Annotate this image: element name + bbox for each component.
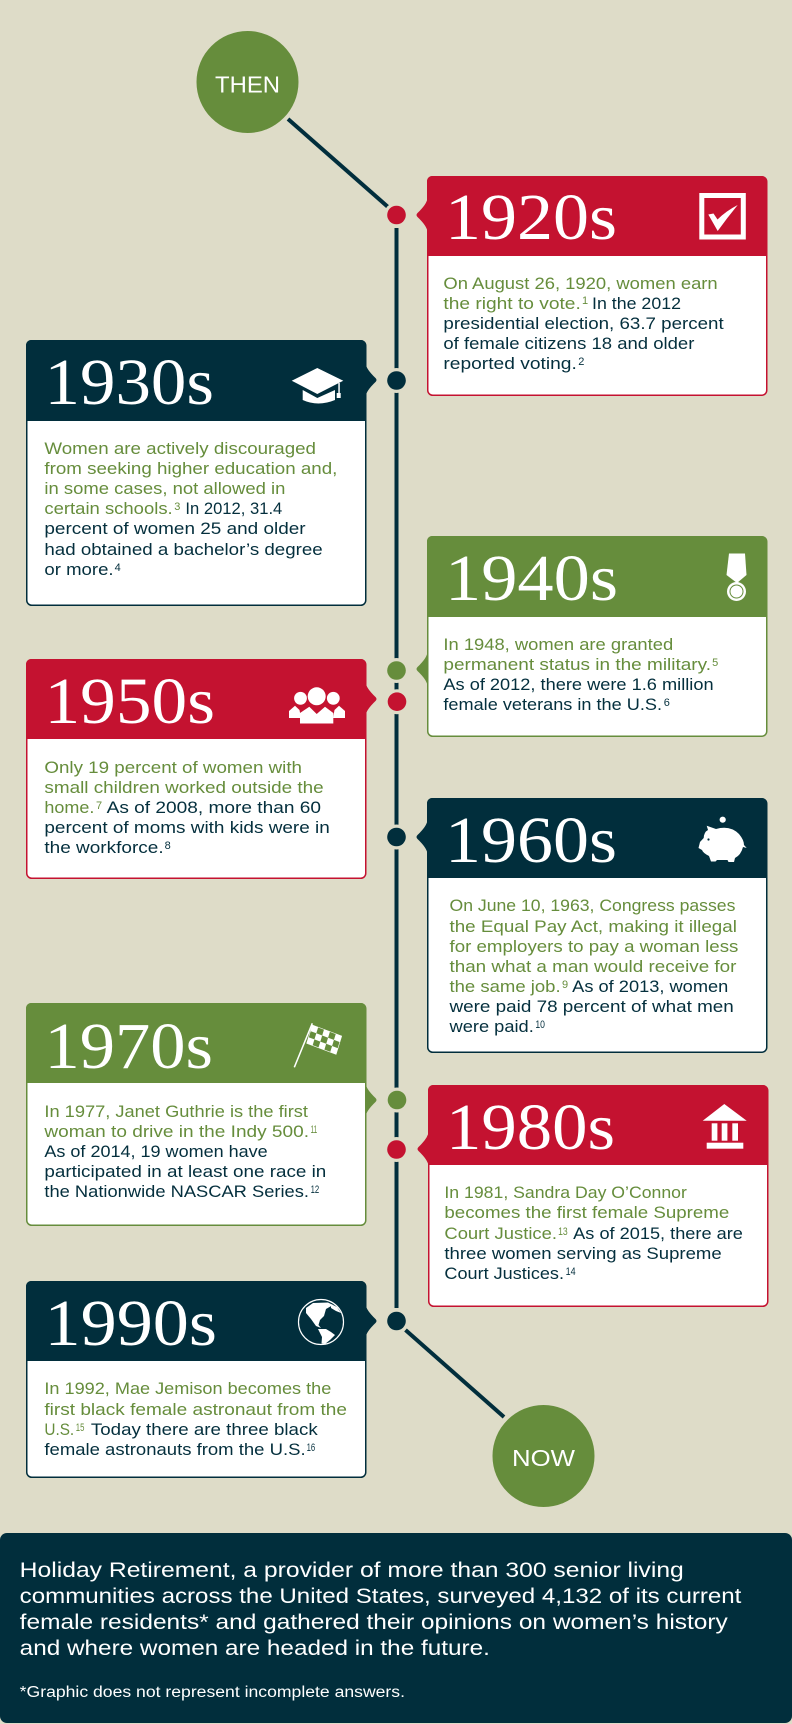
panel: 1930s <box>26 340 376 605</box>
text: 1950s body: 7 <box>96 800 102 812</box>
text: 1920s body: In the 2012 <box>592 294 681 313</box>
then badge: THEN <box>215 72 280 98</box>
text: 1980s body: Court Justices. <box>444 1264 564 1283</box>
text: 1960s body: than what a man would receive for <box>450 957 737 976</box>
icon: graduation cap <box>292 368 343 404</box>
text: 1920s body: On August 26, 1920, women earn <box>443 274 718 293</box>
text: 1960s body: the Equal Pay Act, making it illegal <box>450 917 737 936</box>
text: 1950s body: the workforce. <box>44 838 164 857</box>
text: 1960s body: the same job. <box>450 977 561 996</box>
text: 1980s body: becomes the first female Supreme <box>444 1203 729 1222</box>
text: 1990s body: 16 <box>307 1442 315 1454</box>
text: 1970s body: the Nationwide NASCAR Series. <box>44 1182 309 1201</box>
text: 1980s body: Court Justice. <box>444 1224 557 1243</box>
text: 1970s body <box>43 1102 326 1201</box>
timeline line <box>288 119 504 1417</box>
text: 1930s body <box>44 439 337 579</box>
text: 1950s body: small children worked outside the <box>44 778 324 797</box>
text: 1950s body: As of 2008, more than 60 <box>107 798 321 817</box>
text: 1930s body: from seeking higher education and, <box>44 459 337 478</box>
heading: 1970s: 1970s <box>44 1010 213 1083</box>
icon: globe <box>298 1300 344 1344</box>
text: survey description: Holiday Retirement, a provider of more than 300 senior living <box>20 1559 684 1582</box>
text: 1960s body: were paid 78 percent of what men <box>448 997 734 1016</box>
text: 1990s body <box>44 1379 347 1459</box>
text: 1940s body: female veterans in the U.S. <box>443 695 662 714</box>
text: 1930s body: or more. <box>44 560 114 579</box>
text: 1920s body <box>443 274 724 373</box>
text: 1930s body: 4 <box>115 562 121 574</box>
text: 1970s body: 12 <box>311 1184 319 1196</box>
text: 1980s body <box>444 1183 743 1283</box>
text: 1960s body: 10 <box>535 1019 545 1031</box>
text: 1930s body: In 2012, 31.4 <box>185 499 282 518</box>
text: 1930s body: had obtained a bachelor’s degree <box>44 540 323 559</box>
now badge: NOW <box>512 1445 575 1471</box>
panel: 1970s <box>26 1003 376 1225</box>
text: 1960s body <box>448 896 738 1036</box>
text: 1950s body <box>44 758 330 857</box>
text: survey description: communities across the United States, surveyed 4,132 of its current <box>20 1585 742 1608</box>
text: survey description <box>20 1559 742 1660</box>
text: 1940s body: In 1948, women are granted <box>443 635 673 654</box>
icon: piggy bank <box>698 817 747 862</box>
heading: 1920s: 1920s <box>445 181 617 254</box>
heading: 1950s: 1950s <box>44 665 215 738</box>
text: 1970s body: As of 2014, 19 women have <box>44 1142 268 1161</box>
icon: medal <box>726 554 746 601</box>
text: 1970s body: In 1977, Janet Guthrie is the first <box>44 1102 308 1121</box>
text: 1920s body: presidential election, 63.7 percent <box>443 314 724 333</box>
timeline dots <box>384 202 410 1334</box>
text: 1920s body: reported voting. <box>443 354 577 373</box>
text: 1940s body: 5 <box>712 657 718 669</box>
text: 1960s body: for employers to pay a woman less <box>450 937 738 956</box>
text: 1990s body: Today there are three black <box>91 1420 318 1439</box>
heading: 1960s: 1960s <box>445 804 617 877</box>
icon: checkbox <box>702 196 743 237</box>
heading: 1990s: 1990s <box>44 1287 217 1360</box>
text: 1980s body: three women serving as Supreme <box>444 1244 722 1263</box>
text: 1930s body: in some cases, not allowed in <box>44 479 285 498</box>
text: 1920s body: 1 <box>582 295 588 307</box>
text: 1990s body: 15 <box>76 1422 84 1434</box>
text: 1950s body: 8 <box>165 840 171 852</box>
icon: group of people <box>289 687 345 724</box>
text: 1980s body: As of 2015, there are <box>573 1224 743 1243</box>
text: footnote: *Graphic does not represent incomplete answers. <box>20 1684 405 1701</box>
text: 1940s body <box>443 635 718 714</box>
text: 1940s body: As of 2012, there were 1.6 million <box>443 675 714 694</box>
text: 1970s body: 11 <box>311 1124 317 1136</box>
text: survey description: and where women are headed in the future. <box>20 1637 490 1660</box>
panel: 1990s <box>26 1281 376 1477</box>
heading: 1940s: 1940s <box>445 542 618 615</box>
panel: 1980s <box>418 1085 768 1306</box>
text: 1940s body: 6 <box>664 697 670 709</box>
text: 1930s body: percent of women 25 and older <box>44 519 306 538</box>
text: 1950s body: Only 19 percent of women with <box>44 758 302 777</box>
panel: survey note <box>0 1533 792 1723</box>
text: 1970s body: woman to drive in the Indy 500. <box>43 1122 309 1141</box>
text: survey description: female residents* and gathered their opinions on women’s history <box>20 1611 728 1634</box>
text: 1990s body: In 1992, Mae Jemison becomes the <box>44 1379 331 1398</box>
text: 1990s body: U.S. <box>44 1420 74 1439</box>
text: 1960s body: 9 <box>562 979 568 991</box>
now badge <box>492 1405 594 1507</box>
text: 1950s body: percent of moms with kids were in <box>44 818 330 837</box>
text: 1940s body: permanent status in the military. <box>443 655 711 674</box>
text: 1930s body: certain schools. <box>44 499 173 518</box>
icon: courthouse <box>703 1104 747 1149</box>
text: 1960s body: were paid. <box>448 1017 534 1036</box>
heading: 1930s: 1930s <box>44 346 214 419</box>
panel: 1920s <box>416 176 767 395</box>
text: 1990s body: female astronauts from the U.S. <box>44 1440 306 1459</box>
text: 1920s body: of female citizens 18 and older <box>443 334 695 353</box>
heading: 1980s: 1980s <box>446 1091 615 1164</box>
panel: 1960s <box>416 798 767 1052</box>
text: 1980s body: In 1981, Sandra Day O’Connor <box>444 1183 687 1202</box>
text: 1980s body: 13 <box>558 1226 568 1238</box>
panel: 1940s <box>416 536 767 736</box>
icon: checkered flag <box>294 1023 342 1067</box>
text: 1960s body: As of 2013, women <box>572 977 728 996</box>
text: 1970s body: participated in at least one race in <box>44 1162 326 1181</box>
text: 1950s body: home. <box>44 798 94 817</box>
text: 1920s body: the right to vote. <box>443 294 581 313</box>
then badge <box>196 31 298 133</box>
text: 1960s body: On June 10, 1963, Congress passes <box>450 896 735 915</box>
text: 1930s body: 3 <box>174 501 180 513</box>
text: 1980s body: 14 <box>566 1266 576 1278</box>
panel: 1950s <box>26 659 376 878</box>
text: 1930s body: Women are actively discouraged <box>44 439 316 458</box>
text: 1920s body: 2 <box>578 356 584 368</box>
text: 1990s body: first black female astronaut from the <box>44 1400 347 1419</box>
